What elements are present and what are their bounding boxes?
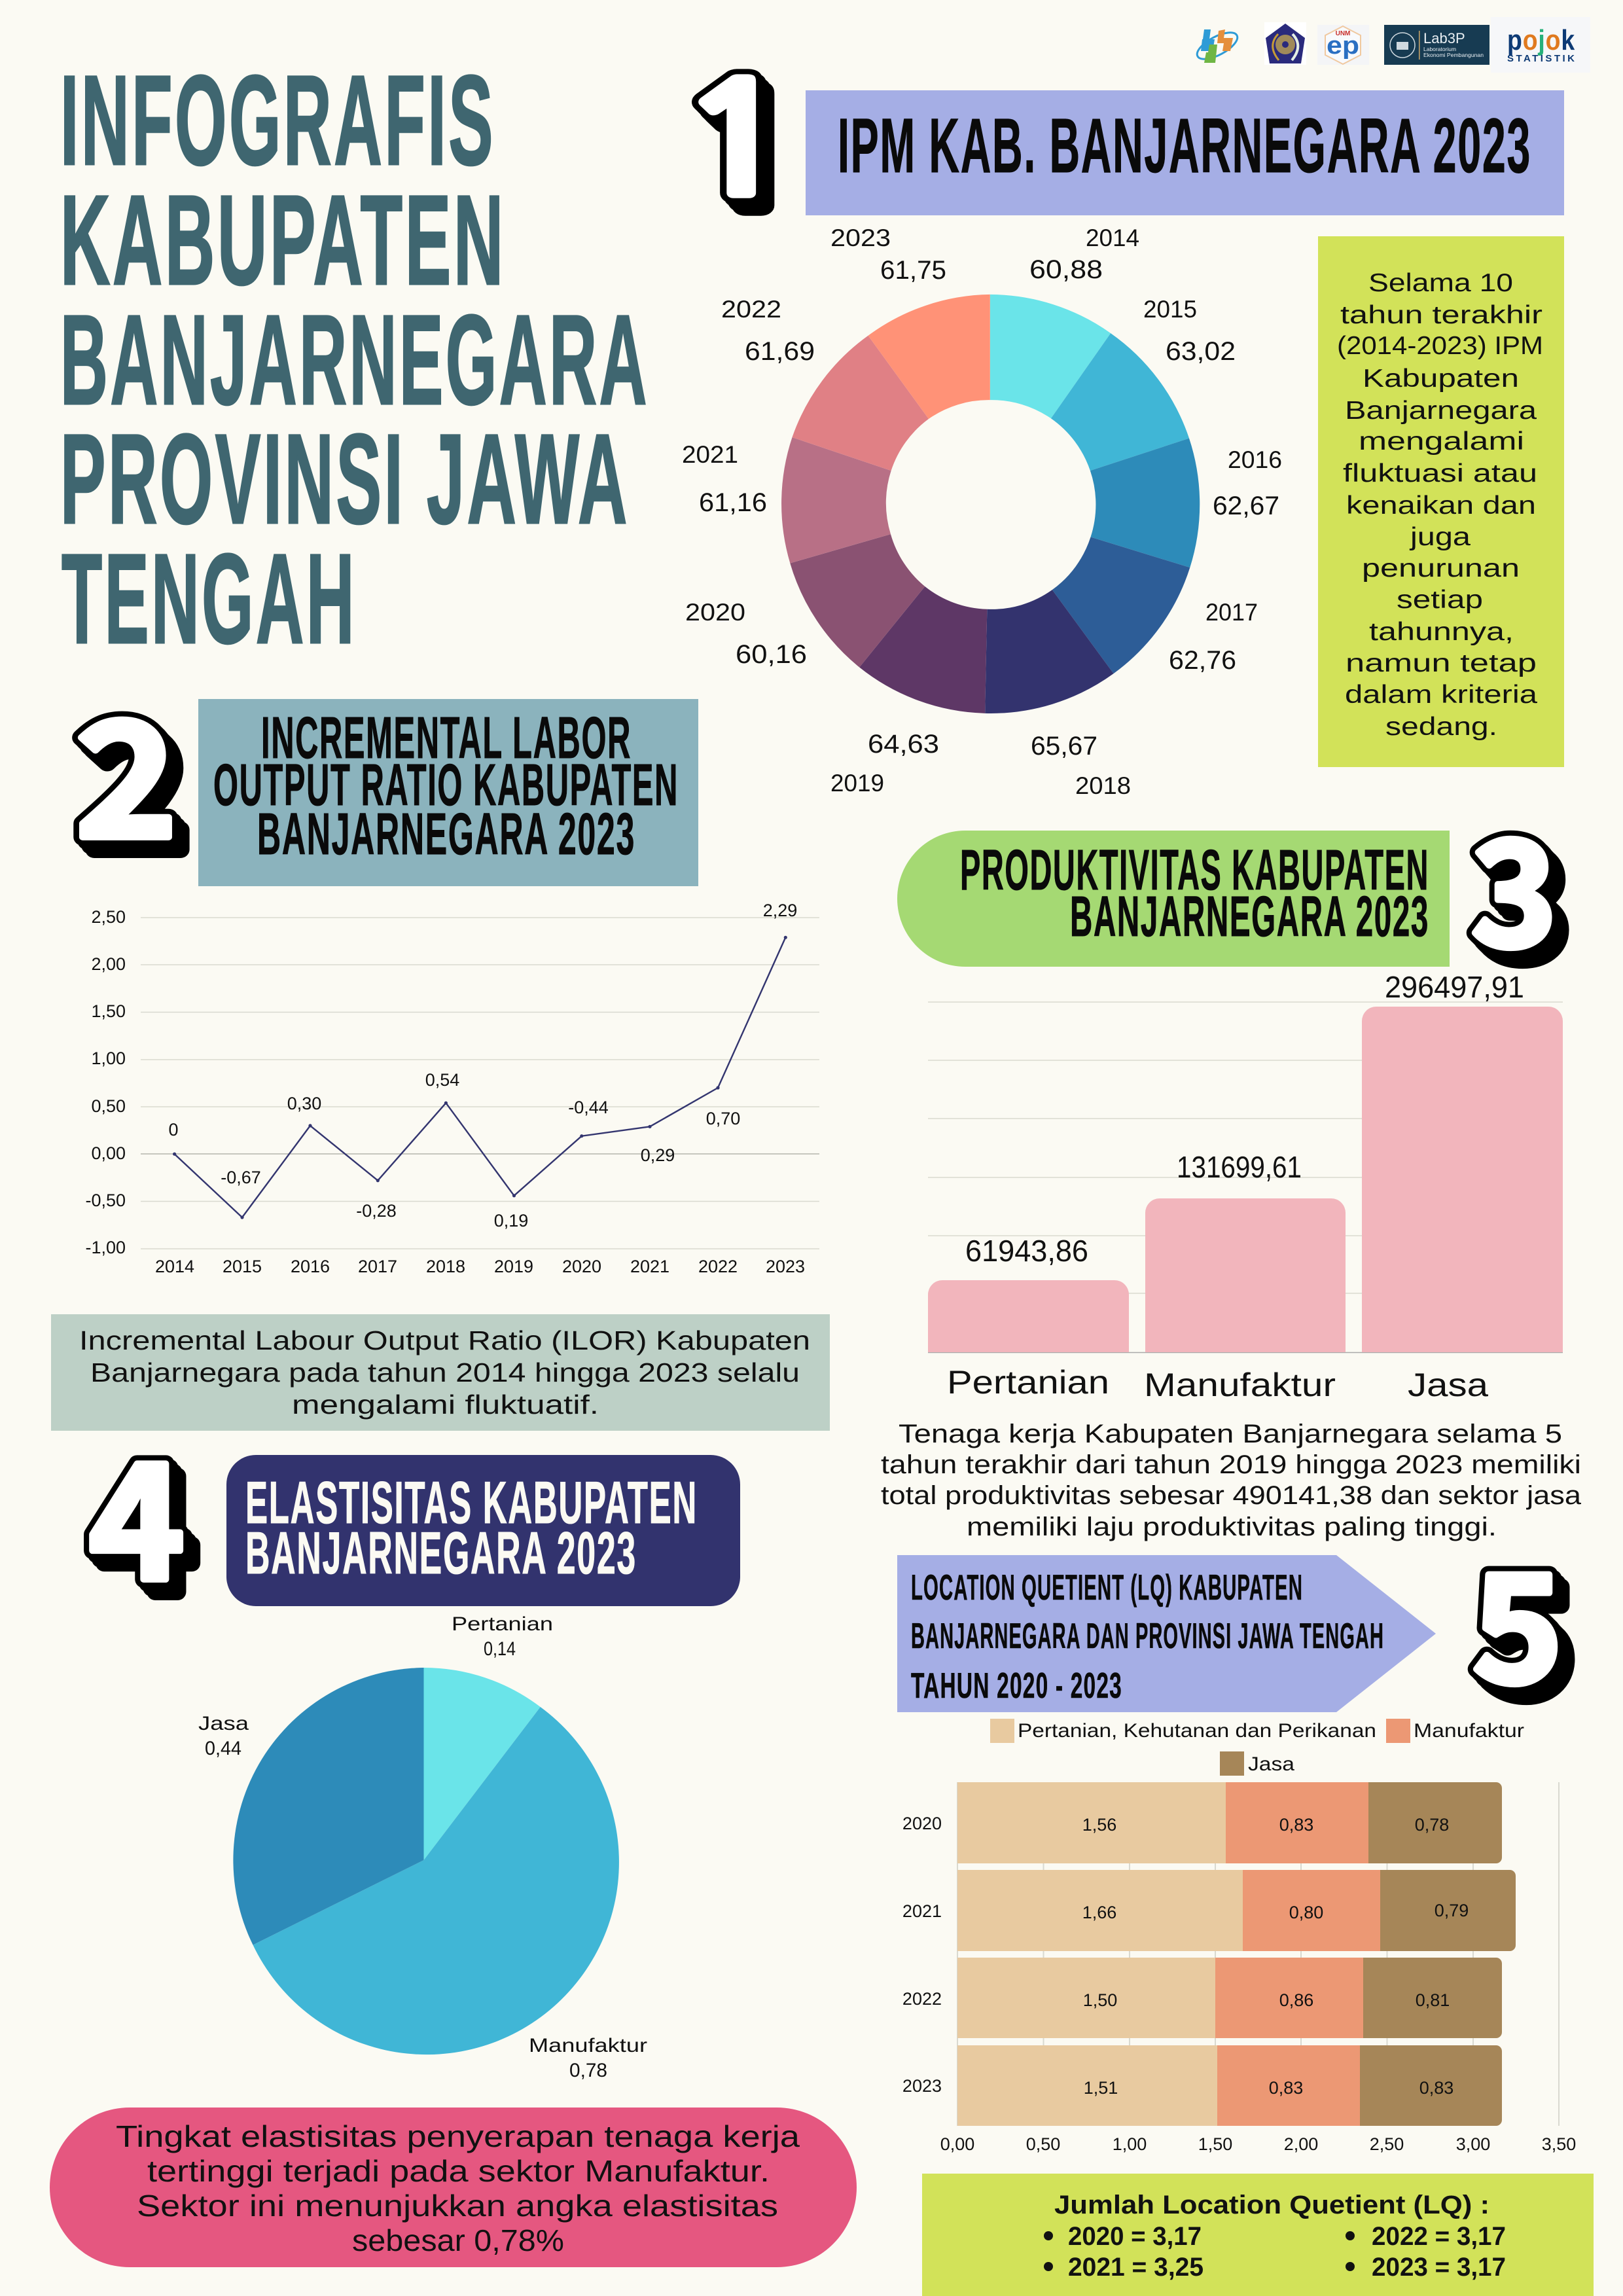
line chart: ILOR: 0,29 xyxy=(641,1145,675,1165)
bar row 2022 xyxy=(957,1958,1502,2038)
line chart: ILOR: 2017 xyxy=(358,1257,397,1276)
line chart: ILOR: 2018 xyxy=(426,1257,465,1276)
line chart: ILOR: 0,30 xyxy=(287,1094,321,1113)
pie chart: elastisitas: 0,44 xyxy=(205,1738,241,1759)
panel 1 heading xyxy=(806,90,1564,215)
donut labels: 62,76 xyxy=(1169,646,1236,675)
number 5: 5 xyxy=(1480,1518,1571,1734)
bar row 2020: 0,78 xyxy=(1415,1815,1449,1835)
number 1 xyxy=(677,65,808,230)
pie chart: elastisitas: Manufaktur xyxy=(529,2035,647,2056)
main title: INFOGRAFIS xyxy=(60,49,495,192)
bar chart: produktivitas: 61943,86 xyxy=(965,1234,1088,1268)
logo: Lab EP xyxy=(1384,25,1489,65)
pie chart: elastisitas: Jasa xyxy=(198,1713,249,1734)
donut labels: 2017 xyxy=(1205,599,1258,626)
bar chart: produktivitas: Manufaktur xyxy=(1144,1367,1336,1403)
bar: Manufaktur xyxy=(1145,1198,1346,1352)
line chart: ILOR: -0,44 xyxy=(568,1098,609,1117)
donut labels: 65,67 xyxy=(1031,732,1097,761)
callout: elastisitas summary: sebesar 0,78% xyxy=(352,2223,564,2257)
chart legend xyxy=(990,1719,1524,1776)
text box: IPM summary: fluktuasi atau xyxy=(1343,459,1537,488)
bar row 2023: 1,51 xyxy=(1084,2078,1118,2098)
logo: Pojok Statistik xyxy=(1491,17,1590,73)
value axis labels: 3,00 xyxy=(1456,2134,1490,2154)
pie chart: elastisitas: 0,78 xyxy=(569,2060,607,2081)
bar row 2023: 0,83 xyxy=(1419,2078,1454,2098)
line chart: ILOR: 0,70 xyxy=(706,1109,740,1128)
panel 2 heading xyxy=(198,699,698,886)
number 2: 2 xyxy=(75,653,177,884)
number 4: 4 xyxy=(89,1393,185,1626)
logo: Lab EP: Ekonomi Pembangunan xyxy=(1423,52,1484,58)
number 1: 1 xyxy=(677,65,796,218)
text box: IPM summary: dalam kriteria xyxy=(1345,681,1537,709)
number 1: 1 xyxy=(677,65,796,218)
number 3: 3 xyxy=(1471,777,1557,988)
logo: EP UNM xyxy=(1317,25,1369,65)
text box: IPM summary: setiap xyxy=(1397,586,1483,614)
text box: ILOR summary: Banjarnegara pada tahun 2014 hingga 2023 selalu xyxy=(90,1357,800,1388)
logos row xyxy=(1193,17,1590,73)
number 2: 2 xyxy=(79,656,181,888)
text box: jumlah LQ: 2021 = 3,25 xyxy=(1068,2253,1204,2282)
number 1: 1 xyxy=(681,69,800,222)
callout: elastisitas summary: Tingkat elastisitas penyerapan tenaga kerja xyxy=(116,2119,800,2153)
donut chart: IPM 2014-2023 xyxy=(781,295,1200,713)
donut labels: 2014 xyxy=(1086,224,1139,251)
main title: PROVINSI JAWA xyxy=(60,408,630,550)
value axis labels: 3,50 xyxy=(1542,2134,1576,2154)
number 2: 2 xyxy=(75,653,177,884)
bar row 2020 xyxy=(957,1782,1502,1863)
main title: TENGAH xyxy=(62,528,357,670)
number 4: 4 xyxy=(101,1406,196,1638)
value axis labels: 0,50 xyxy=(1026,2134,1060,2154)
panel 3 heading xyxy=(897,831,1450,967)
line chart: ILOR xyxy=(85,901,819,1276)
donut labels: 2016 xyxy=(1228,446,1282,473)
line chart: ILOR: 0,19 xyxy=(494,1211,528,1230)
text box: ILOR summary xyxy=(51,1314,830,1431)
callout: elastisitas summary: tertinggi terjadi pada sektor Manufaktur. xyxy=(147,2154,770,2188)
year axis labels xyxy=(902,1814,942,2096)
number 2: 2 xyxy=(83,661,185,892)
line chart: ILOR: -0,67 xyxy=(221,1168,261,1187)
main title: KABUPATEN xyxy=(60,169,506,312)
text block: produktivitas summary: total produktivitas sebesar 490141,38 dan sektor jasa xyxy=(881,1481,1582,1510)
number 1: 1 xyxy=(689,78,808,230)
line chart: ILOR: 2,50 xyxy=(91,907,126,927)
logo: Pojok Statistik: pojok xyxy=(1507,24,1575,56)
line chart: ILOR: -0,28 xyxy=(356,1201,397,1221)
logo: Universitas Muhammadiyah Malang xyxy=(1264,22,1306,65)
bar row 2020: 1,56 xyxy=(1082,1815,1116,1835)
number 4: 4 xyxy=(93,1397,188,1630)
stacked bar chart: location quotient xyxy=(902,1782,1576,2154)
value axis labels: 2,00 xyxy=(1284,2134,1318,2154)
text box: ILOR summary: mengalami fluktuatif. xyxy=(292,1390,599,1420)
text block: produktivitas summary: tahun terakhir dari tahun 2019 hingga 2023 memiliki xyxy=(881,1450,1581,1479)
text box: ILOR summary: Incremental Labour Output Ratio (ILOR) Kabupaten xyxy=(79,1325,810,1355)
bar chart: produktivitas: Jasa xyxy=(1408,1367,1488,1403)
chart legend: Manufaktur xyxy=(1414,1720,1524,1742)
text box: IPM summary: tahun terakhir xyxy=(1340,301,1543,329)
donut labels: 61,75 xyxy=(880,256,946,285)
panel 4 heading: ELASTISITAS KABUPATEN xyxy=(245,1470,698,1536)
text block: produktivitas summary xyxy=(881,1420,1582,1541)
bar row 2021: 1,66 xyxy=(1082,1903,1116,1922)
line chart: ILOR: 2,29 xyxy=(763,901,797,920)
donut labels: 2021 xyxy=(682,441,738,468)
text block: produktivitas summary: Tenaga kerja Kabupaten Banjarnegara selama 5 xyxy=(899,1420,1562,1448)
line chart: ILOR: 2023 xyxy=(766,1257,805,1276)
value axis labels: 1,50 xyxy=(1198,2134,1232,2154)
donut labels: 2019 xyxy=(830,770,884,797)
text box: IPM summary: tahunnya, xyxy=(1369,618,1514,646)
donut labels: 2020 xyxy=(685,599,745,626)
bar row 2022: 0,86 xyxy=(1279,1990,1313,2010)
donut labels: 2015 xyxy=(1143,296,1197,323)
callout: elastisitas summary: Sektor ini menunjukkan angka elastisitas xyxy=(137,2189,778,2223)
line chart: ILOR: 2021 xyxy=(630,1257,669,1276)
number 3: 3 xyxy=(1479,785,1565,996)
bar chart: produktivitas: 296497,91 xyxy=(1385,970,1524,1004)
bar row 2021 xyxy=(957,1870,1516,1951)
number 5: 5 xyxy=(1484,1522,1575,1738)
panel 4 heading: BANJARNEGARA 2023 xyxy=(245,1520,637,1587)
panel 5 heading arrow: LOCATION QUETIENT (LQ) KABUPATEN xyxy=(911,1567,1303,1607)
donut labels xyxy=(682,224,1282,799)
pie chart: elastisitas xyxy=(198,1613,647,2081)
bar: Jasa xyxy=(1362,1007,1563,1352)
number 3: 3 xyxy=(1475,781,1561,992)
donut labels: 2022 xyxy=(721,296,781,323)
year axis labels: 2023 xyxy=(902,2076,942,2096)
bar row 2020: 0,83 xyxy=(1279,1815,1313,1835)
year axis labels: 2022 xyxy=(902,1989,942,2009)
panel 2 heading: OUTPUT RATIO KABUPATEN xyxy=(213,753,679,818)
text box: jumlah LQ: Jumlah Location Quetient (LQ) : xyxy=(1054,2191,1489,2219)
line chart: ILOR: 2015 xyxy=(223,1257,262,1276)
donut labels: 2018 xyxy=(1075,772,1131,799)
line chart: ILOR: 2014 xyxy=(155,1257,194,1276)
text box: IPM summary: mengalami xyxy=(1359,427,1524,456)
number 3: 3 xyxy=(1483,789,1569,1000)
value axis labels: 1,00 xyxy=(1113,2134,1147,2154)
donut labels: 61,69 xyxy=(745,337,815,366)
line chart: ILOR: 2022 xyxy=(698,1257,738,1276)
callout: elastisitas summary xyxy=(50,2108,857,2267)
text box: IPM summary xyxy=(1318,236,1564,767)
year axis labels: 2021 xyxy=(902,1901,942,1921)
line chart: ILOR: 2019 xyxy=(494,1257,533,1276)
line chart: ILOR: 1,00 xyxy=(91,1049,126,1068)
panel 5 heading arrow xyxy=(897,1555,1436,1712)
text box: jumlah LQ: 2020 = 3,17 xyxy=(1068,2222,1202,2251)
value axis labels: 0,00 xyxy=(940,2134,974,2154)
main title: BANJARNEGARA xyxy=(60,289,649,431)
line chart: ILOR: 0 xyxy=(168,1120,179,1139)
donut labels: 61,16 xyxy=(699,488,767,517)
line chart: ILOR: 1,50 xyxy=(91,1001,126,1021)
line chart: ILOR: -0,50 xyxy=(85,1191,126,1210)
number 2: 2 xyxy=(87,665,189,896)
number 3: 3 xyxy=(1471,777,1557,988)
text box: IPM summary: Selama 10 xyxy=(1368,269,1513,297)
value axis labels: 2,50 xyxy=(1370,2134,1404,2154)
bar: Pertanian xyxy=(928,1280,1129,1352)
pie chart: elastisitas: Pertanian xyxy=(452,1613,553,1635)
text box: IPM summary: juga xyxy=(1410,523,1471,551)
text box: jumlah LQ: 2023 = 3,17 xyxy=(1372,2253,1506,2282)
line chart: ILOR: 0,50 xyxy=(91,1096,126,1116)
logo: EP UNM: UNM xyxy=(1336,30,1350,37)
number 4: 4 xyxy=(97,1402,192,1634)
text box: IPM summary: kenaikan dan xyxy=(1346,492,1536,520)
pie chart: elastisitas: 0,14 xyxy=(484,1638,516,1660)
line chart: ILOR: 2016 xyxy=(291,1257,330,1276)
text box: jumlah LQ xyxy=(922,2174,1594,2296)
text box: IPM summary: Kabupaten xyxy=(1363,365,1519,393)
chart legend: Jasa xyxy=(1248,1753,1294,1775)
number 5: 5 xyxy=(1472,1509,1563,1725)
bar row 2021: 0,80 xyxy=(1289,1903,1323,1922)
logo: Lab EP: Laboratorium xyxy=(1423,46,1456,52)
number 4: 4 xyxy=(89,1393,185,1626)
main title xyxy=(60,49,649,670)
logo: BPS xyxy=(1193,27,1241,64)
number 5: 5 xyxy=(1476,1513,1567,1729)
bar row 2022: 1,50 xyxy=(1083,1990,1117,2010)
bar row 2023: 0,83 xyxy=(1269,2078,1303,2098)
logo: EP UNM: ep xyxy=(1327,32,1359,60)
donut labels: 2023 xyxy=(830,224,891,251)
line chart: ILOR: 2,00 xyxy=(91,954,126,974)
text box: jumlah LQ: 2022 = 3,17 xyxy=(1372,2222,1506,2251)
line chart: ILOR: 0,54 xyxy=(425,1070,459,1090)
donut labels: 60,88 xyxy=(1029,255,1103,284)
bar chart: produktivitas: 131699,61 xyxy=(1177,1150,1302,1184)
bar chart: produktivitas: Pertanian xyxy=(947,1364,1109,1401)
panel 2 heading: INCREMENTAL LABOR xyxy=(261,706,632,771)
logo: Pojok Statistik: STATISTIK xyxy=(1507,53,1575,64)
text box: IPM summary: sedang. xyxy=(1385,713,1497,741)
line chart: ILOR: 2020 xyxy=(562,1257,601,1276)
line chart: ILOR: -1,00 xyxy=(85,1238,126,1257)
donut labels: 63,02 xyxy=(1166,337,1236,366)
text box: IPM summary: (2014-2023) IPM xyxy=(1337,332,1543,360)
donut labels: 60,16 xyxy=(736,640,807,669)
line chart: ILOR: 0,00 xyxy=(91,1143,126,1163)
bar chart: produktivitas xyxy=(928,970,1563,1403)
bar row 2021: 0,79 xyxy=(1435,1901,1469,1920)
bar row 2023 xyxy=(957,2045,1502,2126)
year axis labels: 2020 xyxy=(902,1814,942,1833)
chart legend: Pertanian, Kehutanan dan Perikanan xyxy=(1018,1720,1376,1742)
text box: IPM summary: penurunan xyxy=(1362,554,1520,583)
panel 4 heading xyxy=(226,1455,740,1606)
text box: IPM summary: Banjarnegara xyxy=(1345,397,1537,425)
value axis labels xyxy=(940,2134,1576,2154)
donut labels: 64,63 xyxy=(868,730,939,759)
number 1: 1 xyxy=(685,74,804,226)
bar row 2022: 0,81 xyxy=(1416,1990,1450,2010)
number 5: 5 xyxy=(1472,1509,1563,1725)
donut labels: 62,67 xyxy=(1213,492,1279,520)
panel 2 heading: BANJARNEGARA 2023 xyxy=(257,802,635,867)
text box: IPM summary: namun tetap xyxy=(1346,649,1537,677)
text block: produktivitas summary: memiliki laju produktivitas paling tinggi. xyxy=(967,1513,1497,1541)
panel 5 heading arrow: TAHUN 2020 - 2023 xyxy=(911,1665,1122,1706)
logo: Lab EP: Lab3P xyxy=(1423,30,1465,46)
